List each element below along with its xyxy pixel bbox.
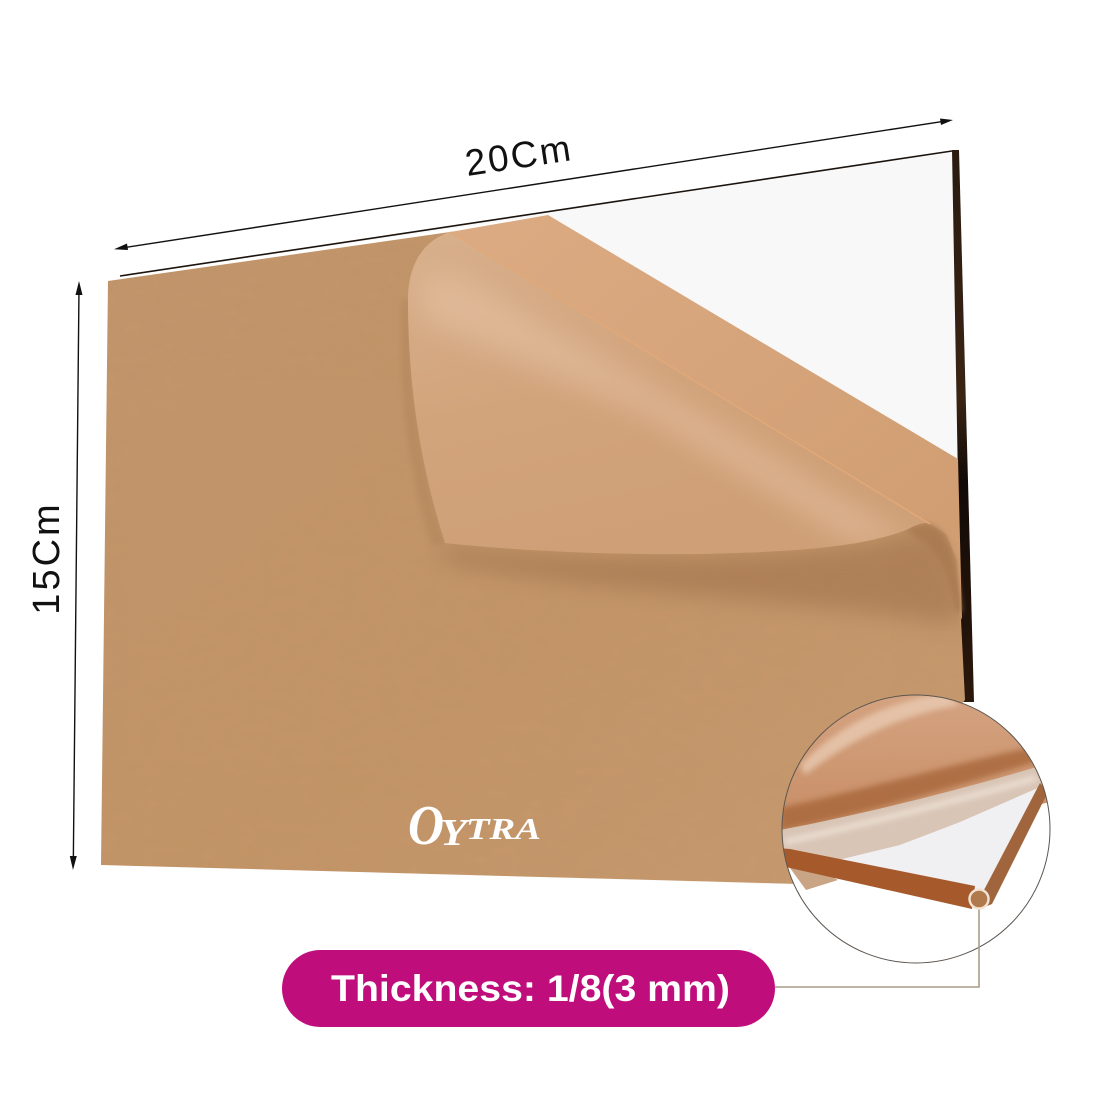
logo letter O: O [408,795,444,857]
lens dark fold band [780,748,1036,830]
width dimension arrow [114,118,953,250]
covering paper in lens [782,696,1047,830]
lens shadow wedge under edge [790,868,838,890]
height dimension arrow [70,281,82,870]
lens side edge of sheet [982,783,1048,908]
shadow under the peeled flap [440,530,960,625]
shadow left of the flap [401,300,445,546]
brand logo [408,795,541,857]
top edge of sheet [120,151,952,276]
dark right edge of sheet [952,150,974,702]
lens light streak [785,778,1036,842]
pill label: Thickness: 1/8(3 mm) [331,968,730,1009]
logo letters TRA: TRA [466,811,541,846]
height label: 15Cm [26,501,68,615]
lens front edge of sheet [778,848,975,909]
peeled paper flap [408,232,930,554]
lens pale film [780,766,1050,862]
thickness leader line [775,908,979,987]
curl at the flap corner [906,524,962,612]
thickness pill [282,950,775,1027]
lens outline [782,695,1050,963]
logo letter Y: Y [440,812,471,854]
thickness marker dot [970,890,988,908]
infographic canvas [32,118,1050,1027]
peeled paper band [450,215,962,620]
lens highlight streak [800,692,960,775]
clear glass surface [120,152,958,470]
lens background [782,695,1050,963]
pill background [282,950,775,1027]
lens contents [782,696,1047,909]
width label: 20Cm [462,127,576,184]
lens clear acrylic [830,787,1040,892]
kraft paper cover [100,220,980,890]
magnified corner lens [782,694,1050,964]
acrylic sheet [100,150,980,890]
